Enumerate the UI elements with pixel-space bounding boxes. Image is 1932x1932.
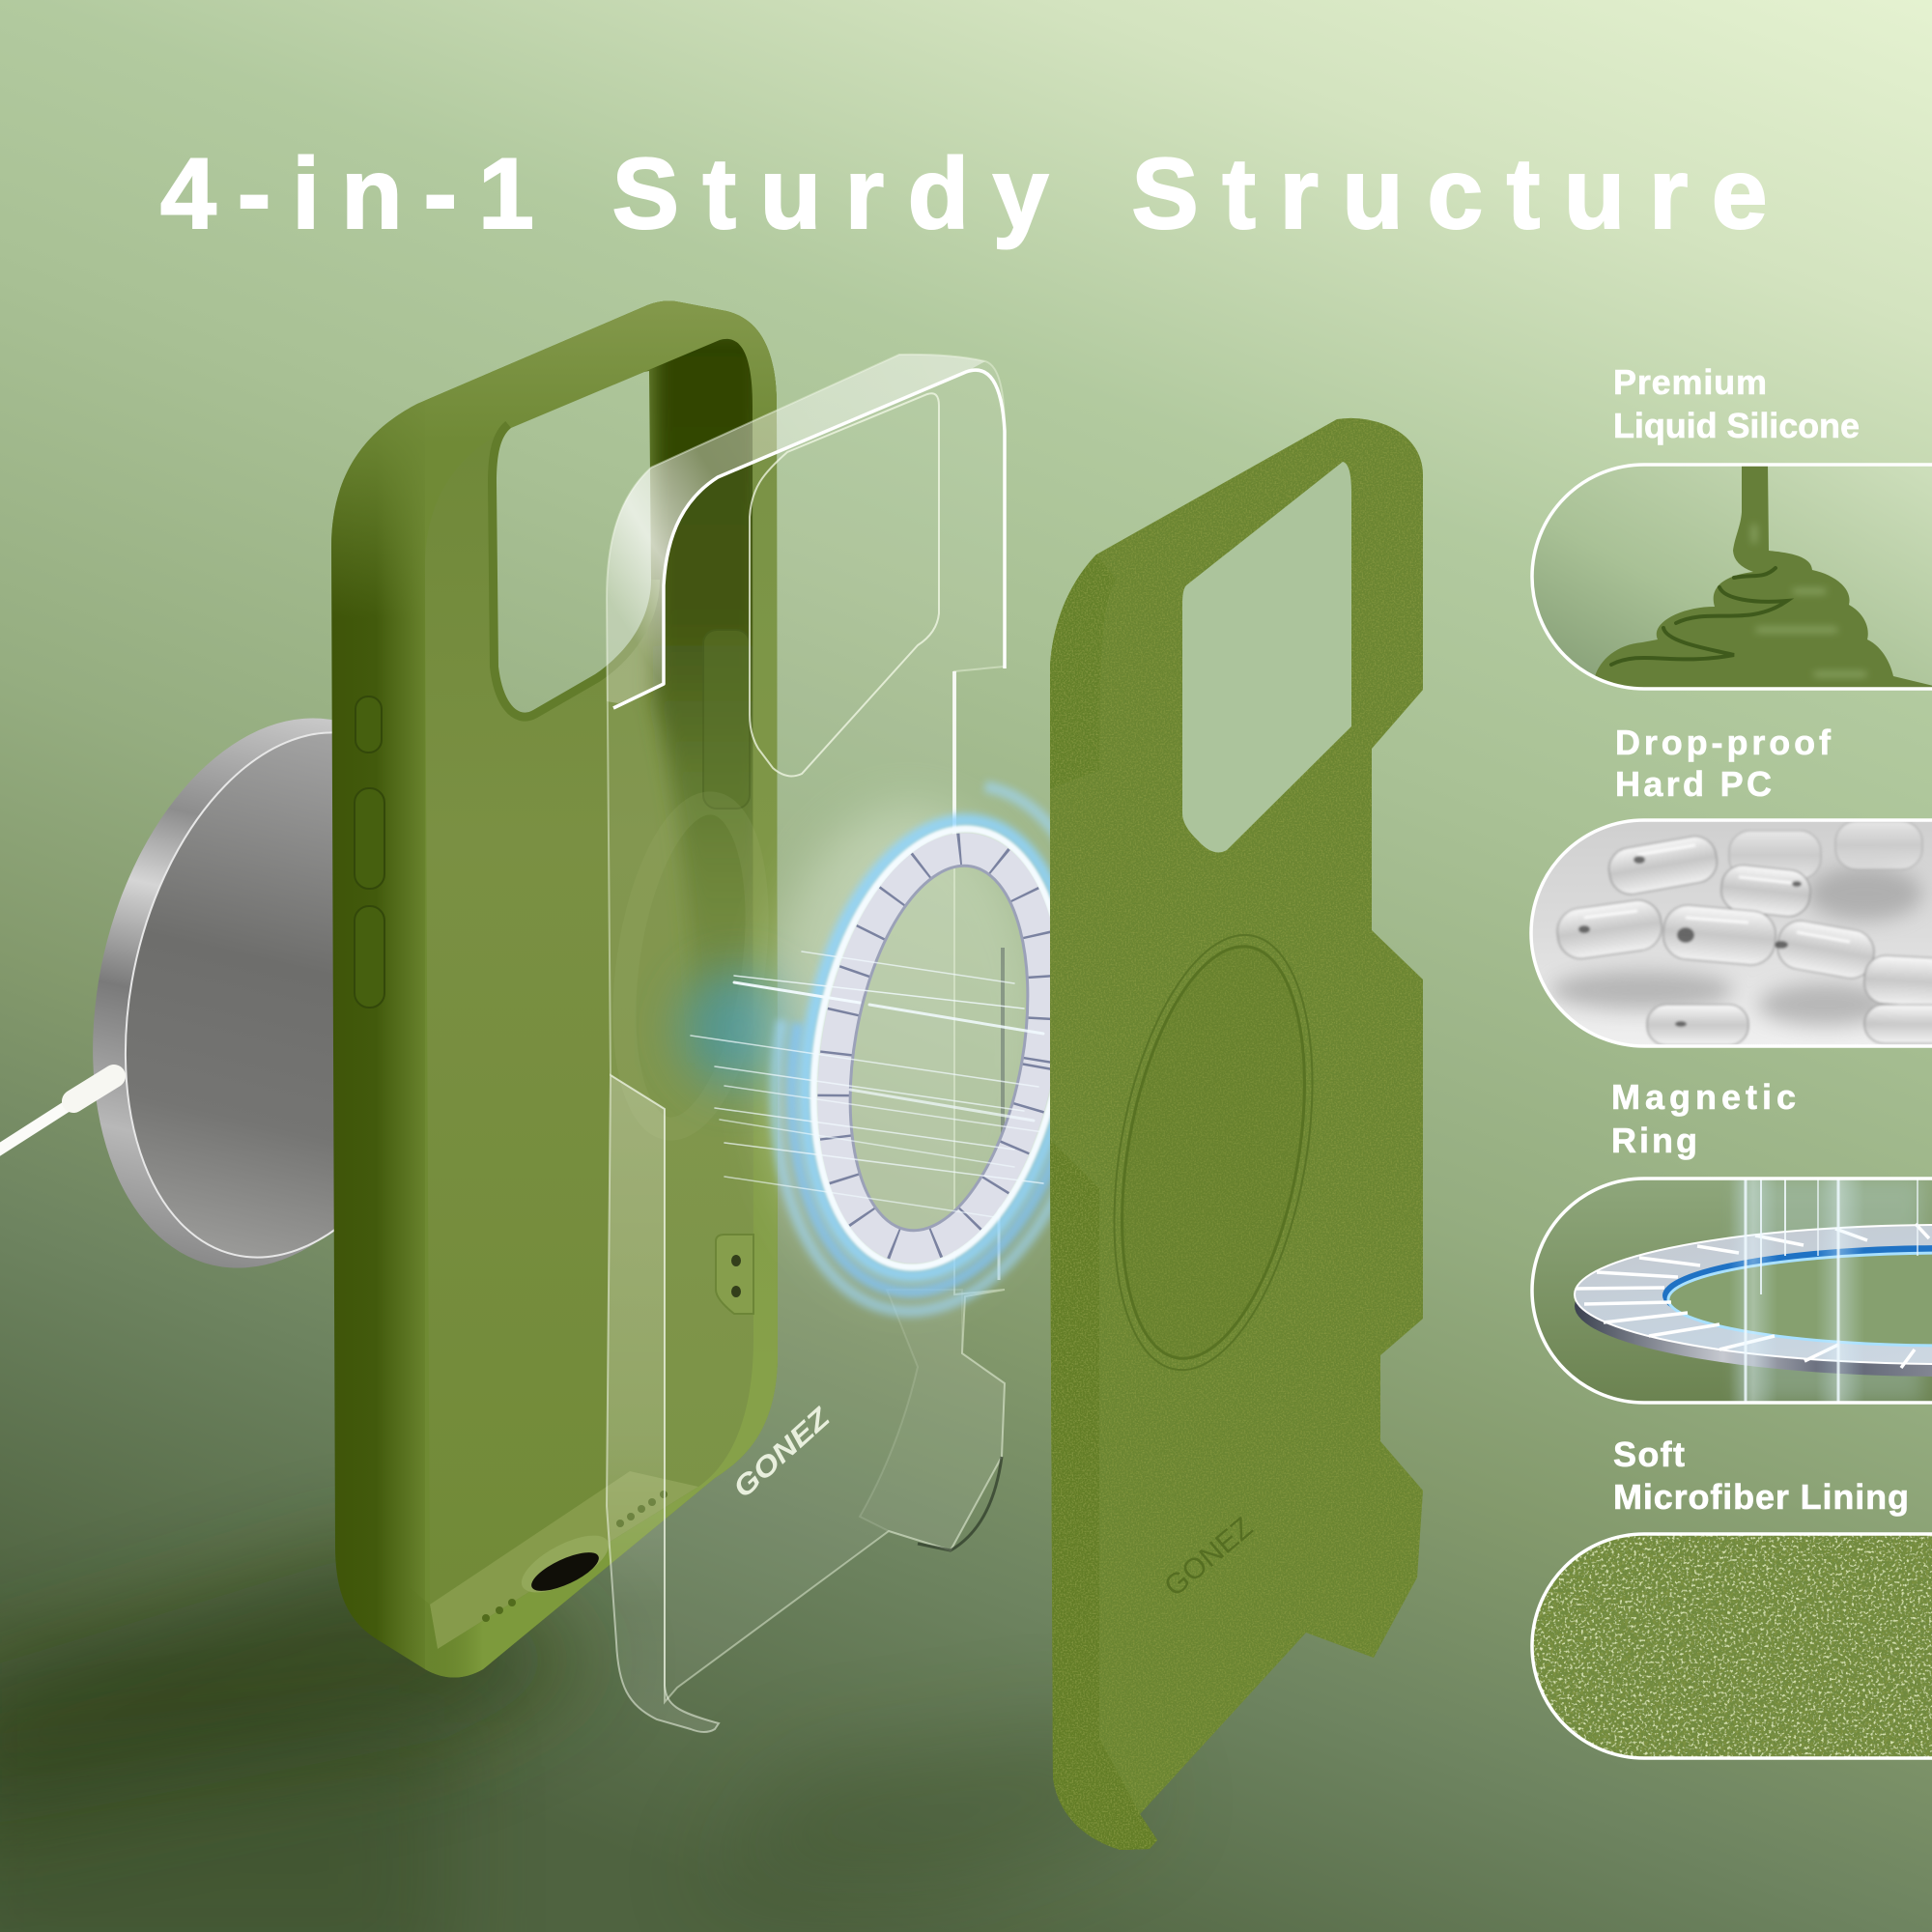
panel: premium liquid silicone <box>1526 362 1932 694</box>
floor shadows <box>0 1546 1159 1932</box>
panel: magnetic ring <box>1526 1077 1932 1406</box>
heading: magnetic ring: Ring <box>1611 1121 1697 1160</box>
panel: drop-proof hard PC <box>1526 723 1932 1053</box>
heading: magnetic ring: Magnetic <box>1611 1077 1796 1117</box>
white rim line <box>613 370 1005 708</box>
phone case: microfiber lining <box>1050 418 1423 1850</box>
shell inner recess and ghost ring <box>606 630 776 1314</box>
lining camera window <box>1182 462 1351 852</box>
pill outline <box>1532 465 1932 689</box>
clear shell logo GONEZ: GONEZ <box>727 1402 837 1504</box>
inner face of the shell <box>425 566 753 1479</box>
pill outline <box>1531 820 1932 1046</box>
pill image: ring close-up <box>1526 1174 1932 1406</box>
pill image: clear beads <box>1526 816 1932 1053</box>
shaded inner wall <box>430 328 763 1649</box>
magnetic ring <box>691 759 1142 1337</box>
title: 4-in-1 <box>160 138 612 250</box>
top edge highlight <box>607 355 985 703</box>
heading: drop-proof hard PC: Drop-proof <box>1615 723 1832 762</box>
icon: MagSafe charger disc <box>42 681 513 1305</box>
pill image: silicone pour <box>1526 462 1932 694</box>
lower side wall <box>607 1075 719 1732</box>
lining magnet circle imprint <box>1084 920 1343 1385</box>
window rim <box>497 428 651 713</box>
panel: soft microfiber lining <box>1532 1435 1932 1758</box>
pill image: microfiber texture <box>1532 1534 1932 1758</box>
pill outline <box>1532 1534 1932 1758</box>
heading: premium liquid silicone: Premium <box>1613 362 1767 402</box>
heading: premium liquid silicone: Liquid Silicone <box>1613 406 1860 445</box>
charging port and speaker holes <box>482 1491 668 1622</box>
title: Sturdy Structure <box>612 138 1791 250</box>
clear hard PC shell <box>607 355 1005 1732</box>
heading: soft microfiber lining: Soft <box>1613 1435 1685 1474</box>
shell side buttons <box>355 696 384 1008</box>
shell lower rim and right rim <box>328 290 787 1700</box>
field lines through ring <box>691 952 1043 1217</box>
lower clear tab <box>860 1290 1005 1550</box>
lining side walls <box>1050 554 1116 788</box>
heading: soft microfiber lining: Microfiber Lining <box>1613 1477 1909 1517</box>
ring segments <box>805 833 1073 1264</box>
lining logo GONEZ: GONEZ <box>1158 1512 1259 1603</box>
ring outer glow <box>736 759 1142 1337</box>
heading: drop-proof hard PC: Hard PC <box>1615 764 1772 804</box>
magnetic field streak glow <box>681 807 1053 1290</box>
phone case: silicone outer shell <box>328 290 787 1700</box>
clear shell camera cutout <box>750 393 939 776</box>
icon: charging cable <box>0 1076 114 1155</box>
pill outline <box>1532 1179 1932 1403</box>
